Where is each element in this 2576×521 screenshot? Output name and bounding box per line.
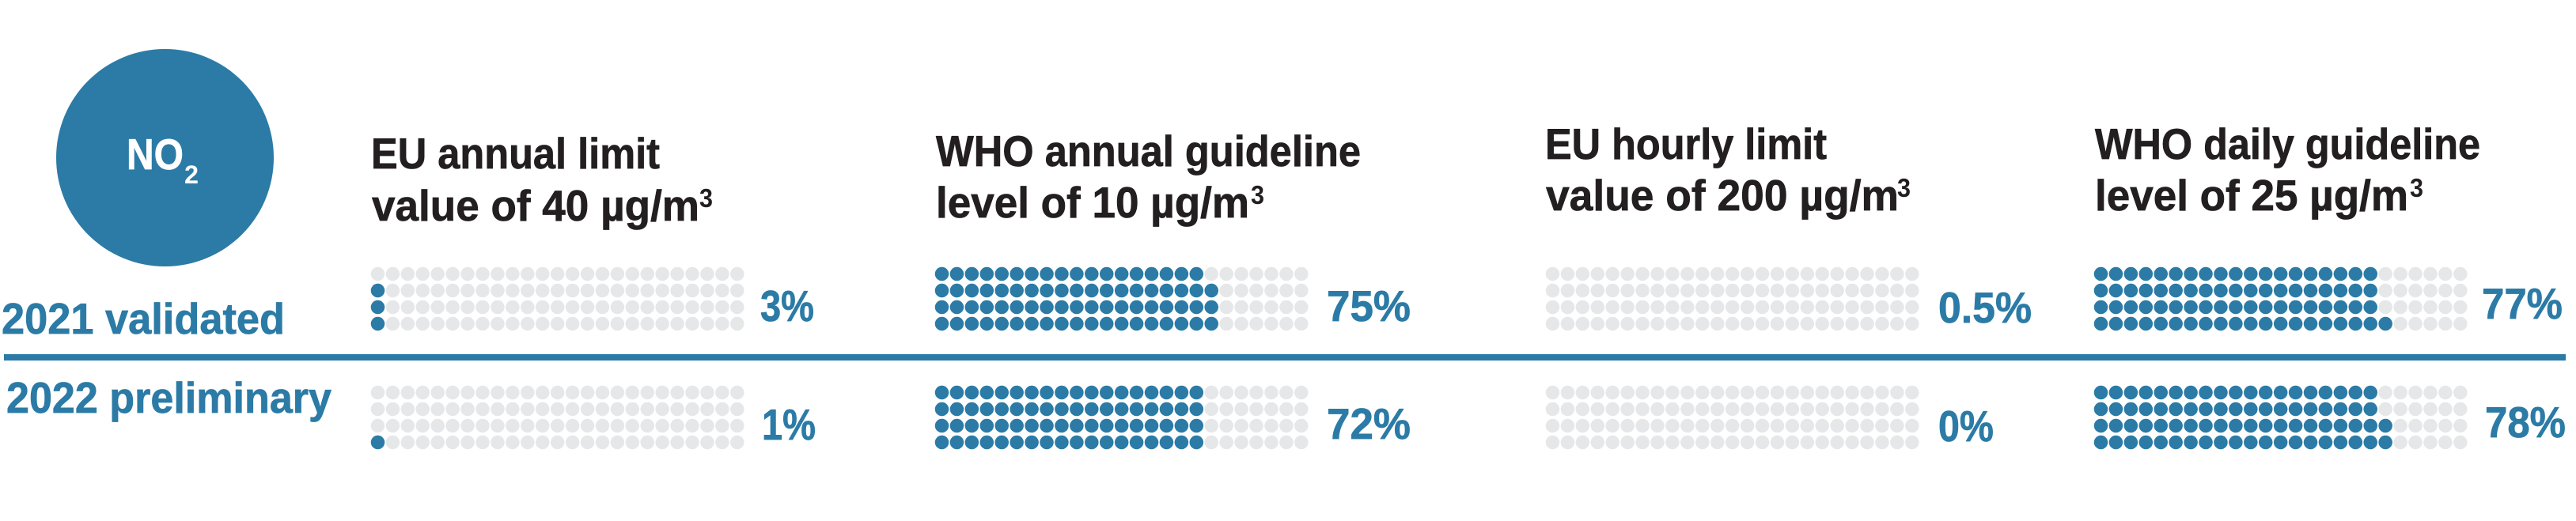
dot chart: 2021, 0.5% [1552,274,1912,324]
heading: WHO annual guideline level: level of 10 µg/m [936,178,1249,227]
heading: EU annual limit value [371,129,713,230]
divider line between years [4,354,2566,361]
pollutant badge: NO2 [56,49,274,266]
value: 77%: 77% [2482,279,2563,328]
heading: WHO daily guideline level: level of 25 µg/m [2095,171,2408,220]
heading: EU hourly limit value: 3 [1897,173,1911,202]
value: 0.5%: 0.5% [1938,283,2032,332]
row label: 2022 preliminary: 2022 preliminary [6,373,331,422]
heading: EU annual limit value: value of 40 µg/m [372,181,699,230]
value: 72%: 72% [1327,399,1411,448]
dot chart: 2022, 0% [1552,392,1912,443]
column 3: EU hourly limit [1545,119,2032,451]
heading: WHO daily guideline level: 3 [2410,173,2423,202]
pollutant badge: NO2: NO [127,130,184,179]
heading: EU hourly limit value [1545,119,1911,220]
heading: WHO annual guideline level: WHO annual guideline [936,126,1361,176]
heading: WHO annual guideline level: 3 [1251,180,1264,210]
dot chart: 2021, 3% [378,274,737,324]
value: 0%: 0% [1938,402,1994,451]
heading: EU annual limit value: 3 [699,183,713,213]
dot chart: 2022, 1% [378,392,737,443]
column 4: WHO daily guideline [2095,119,2566,447]
value: 75%: 75% [1327,281,1411,330]
column 1: EU annual limit [371,129,816,449]
value: 3%: 3% [760,281,814,330]
heading: EU hourly limit value: EU hourly limit [1545,119,1827,168]
dot chart: 2022, 78% [2101,392,2460,443]
row label: 2021 validated: 2021 validated [2,294,285,343]
heading: WHO annual guideline level [936,126,1361,227]
value: 78%: 78% [2485,398,2566,447]
heading: EU annual limit value: EU annual limit [371,129,660,178]
dot chart: 2021, 75% [941,274,1301,324]
pollutant badge: NO2: 2 [184,160,199,189]
heading: WHO daily guideline level: WHO daily guideline [2095,119,2480,168]
heading: EU hourly limit value: value of 200 µg/m [1546,171,1899,220]
heading: WHO daily guideline level [2095,119,2480,220]
column 2: WHO annual guideline [936,126,1411,448]
dot chart: 2022, 72% [941,392,1301,443]
value: 1%: 1% [762,400,816,449]
dot chart: 2021, 77% [2101,274,2460,324]
